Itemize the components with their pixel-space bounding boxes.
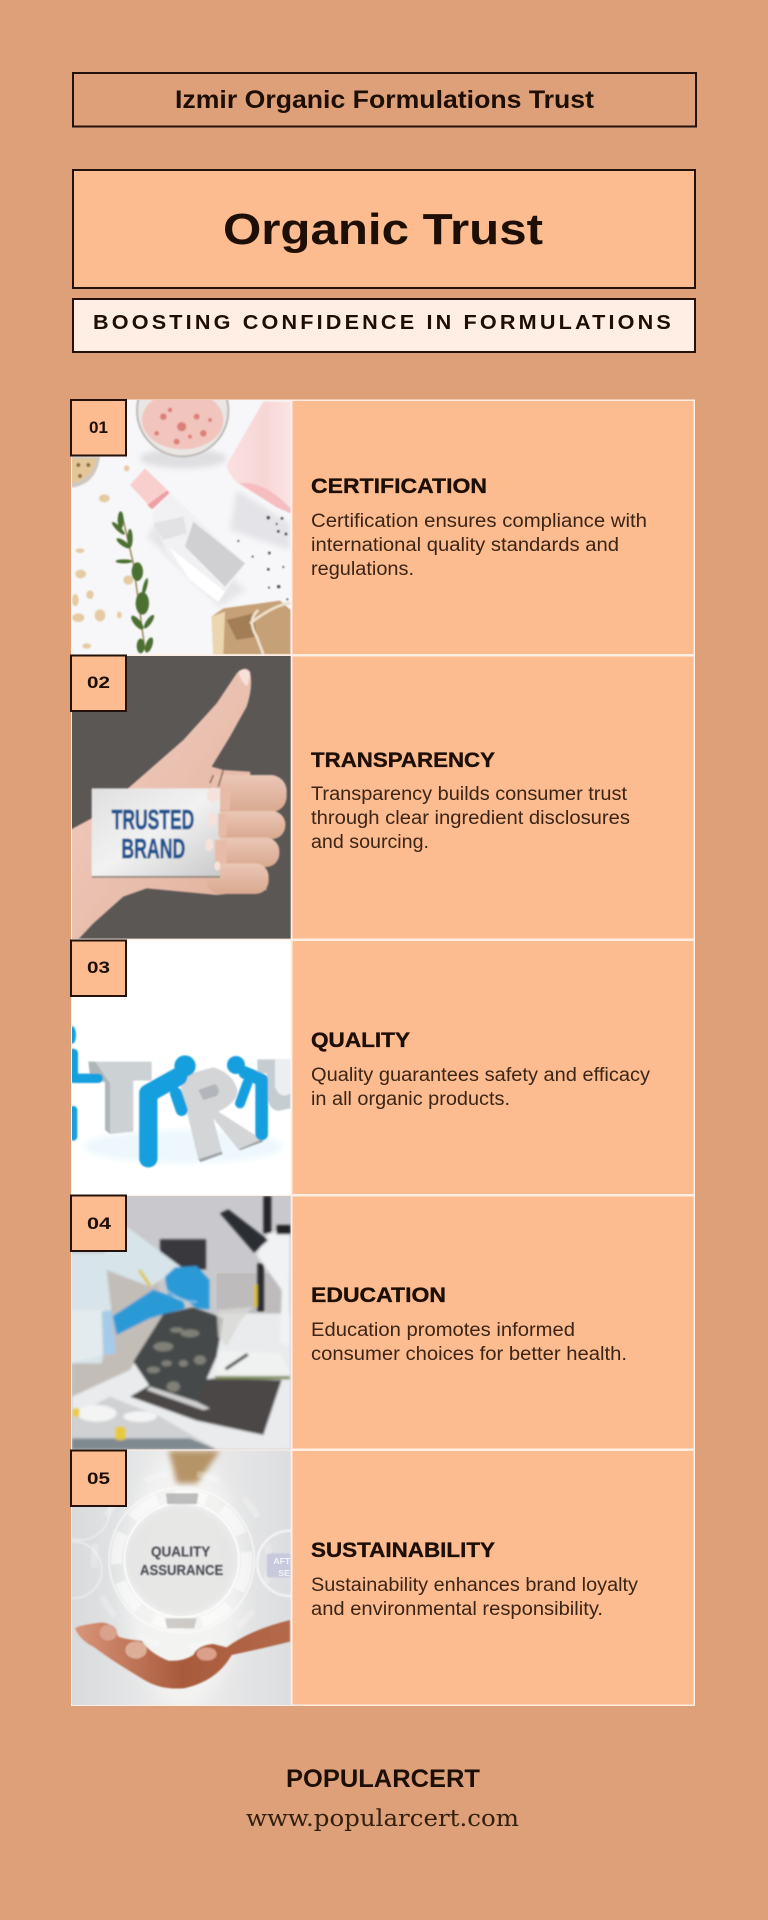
heading: transparency: TRANSPARENCY (311, 749, 495, 772)
description: transparency: and sourcing. (311, 832, 429, 853)
description: transparency: Transparency builds consumer trust (311, 784, 628, 805)
description: certification: regulations. (311, 559, 414, 580)
badge 03 (71, 940, 126, 996)
photo: cosmetics flat lay (72, 400, 291, 654)
photo: quality assurance hand: AFT (273, 1556, 291, 1566)
panel: sustainability (45, 1450, 693, 1707)
badge 03: 03 (87, 958, 110, 977)
photo: lab technician with sample bag (70, 1196, 293, 1453)
organisation banner (73, 73, 696, 126)
badge 05 (71, 1450, 126, 1506)
heading: sustainability: SUSTAINABILITY (311, 1539, 495, 1562)
photo: 3D figures lifting TRUST letters (69, 940, 293, 1197)
panel: education (70, 1196, 693, 1453)
panel: certification (70, 399, 694, 654)
photo: thumbs-up trusted brand card: TRUSTED (112, 804, 194, 835)
organisation banner: Izmir Organic Formulations Trust (175, 86, 595, 114)
description: transparency (311, 784, 630, 853)
description: quality: in all organic products. (311, 1089, 510, 1110)
panel: quality (69, 940, 694, 1197)
description: sustainability (311, 1575, 639, 1620)
photo: quality assurance hand: ASSURANCE (140, 1563, 223, 1579)
description: sustainability: and environmental responsibility. (311, 1599, 603, 1620)
description: certification (311, 511, 647, 580)
description: certification: international quality standards and (311, 535, 619, 556)
heading: quality: QUALITY (311, 1029, 410, 1052)
badge 04 (71, 1196, 126, 1251)
title: Organic Trust (223, 205, 543, 254)
heading: certification: CERTIFICATION (311, 475, 487, 498)
title (73, 170, 695, 288)
photo: quality assurance hand: QUALITY (151, 1545, 211, 1561)
photo: thumbs-up trusted brand card: BRAND (121, 833, 185, 864)
badge 02 (71, 656, 126, 711)
description: education: consumer choices for better health. (311, 1344, 627, 1365)
subtitle: BOOSTING CONFIDENCE IN FORMULATIONS (93, 311, 674, 334)
photo: quality assurance hand: SE (278, 1568, 290, 1578)
description: sustainability: Sustainability enhances brand loyalty (311, 1575, 639, 1596)
badge 02: 02 (87, 673, 110, 692)
description: education (311, 1320, 627, 1365)
description: quality (311, 1065, 651, 1110)
panel: transparency (70, 656, 693, 939)
footer: brand: POPULARCERT (286, 1765, 480, 1793)
footer: website: www.popularcert.com (246, 1806, 519, 1832)
heading: education: EDUCATION (311, 1284, 446, 1307)
description: quality: Quality guarantees safety and efficacy (311, 1065, 651, 1086)
description: education: Education promotes informed (311, 1320, 575, 1341)
badge 01 (71, 400, 126, 456)
badge 05: 05 (87, 1469, 110, 1488)
badge 04: 04 (87, 1214, 112, 1233)
description: certification: Certification ensures compliance with (311, 511, 647, 532)
photo: quality assurance hand (72, 1450, 291, 1705)
subtitle (73, 299, 695, 352)
description: transparency: through clear ingredient disclosures (311, 808, 630, 829)
infographic page (70, 72, 697, 1831)
badge 01: 01 (89, 418, 108, 437)
photo: thumbs-up trusted brand card (70, 656, 293, 939)
